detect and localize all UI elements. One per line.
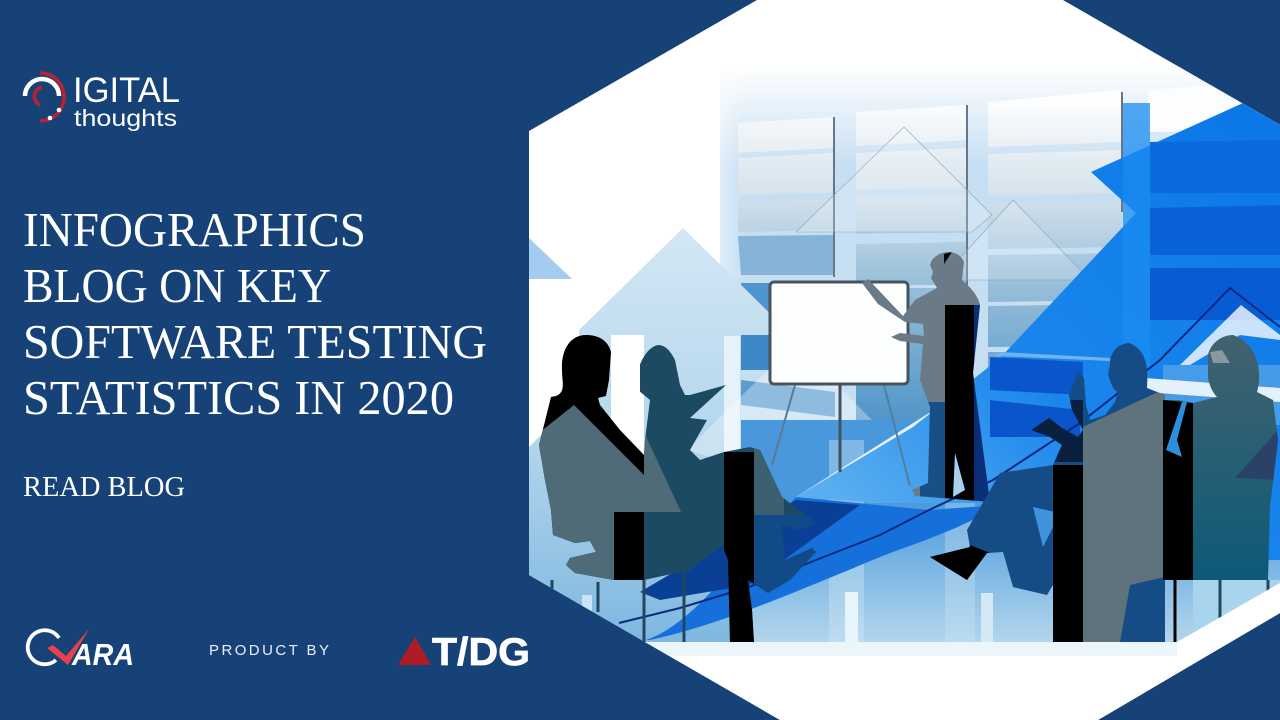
logo: A T/DG bbox=[398, 631, 530, 674]
background window wall bbox=[720, 65, 1280, 420]
white wedge bbox=[796, 413, 930, 503]
silhouette: seated man left bbox=[539, 335, 644, 580]
silhouette: seated man right bbox=[925, 340, 1165, 645]
qara wordmark: ARA bbox=[71, 637, 134, 672]
trend line bbox=[619, 288, 1280, 623]
silhouette: presenter bbox=[860, 250, 995, 510]
blue stream bbox=[646, 497, 1000, 640]
chair legs bbox=[552, 572, 1268, 642]
white diagonal edge bbox=[1177, 583, 1280, 645]
icon: red triangle bbox=[398, 637, 431, 665]
blue rising arrow bbox=[796, 103, 1280, 560]
title: INFOGRAPHICS bbox=[23, 202, 366, 257]
icon: qara ring bbox=[28, 630, 59, 664]
icon: qara check mark bbox=[47, 629, 89, 665]
call to action: read blog: READ BLOG bbox=[23, 471, 185, 503]
icon: logo arcs bbox=[25, 73, 64, 121]
pale arrows bbox=[529, 127, 1090, 642]
logo tagline: thoughts bbox=[74, 105, 177, 131]
logo: Digital Thoughts bbox=[25, 71, 180, 131]
panel: hexagon photo of business presentation bbox=[529, 0, 1280, 720]
title bbox=[23, 202, 487, 425]
logo: Qara bbox=[28, 629, 134, 672]
lower section bbox=[582, 420, 1280, 642]
bottom white strip bbox=[645, 642, 1230, 720]
silhouette: seated woman with notes bbox=[640, 340, 824, 650]
logo wordmark: IGITAL bbox=[73, 71, 180, 110]
product by label: PRODUCT BY bbox=[209, 642, 329, 659]
flipchart bbox=[770, 282, 910, 486]
title: STATISTICS IN 2020 bbox=[23, 370, 454, 425]
silhouette: seated woman right bbox=[1163, 330, 1280, 585]
title: SOFTWARE TESTING bbox=[23, 314, 487, 369]
title: BLOG ON KEY bbox=[23, 258, 331, 313]
tdg wordmark: T/DG bbox=[432, 631, 530, 674]
